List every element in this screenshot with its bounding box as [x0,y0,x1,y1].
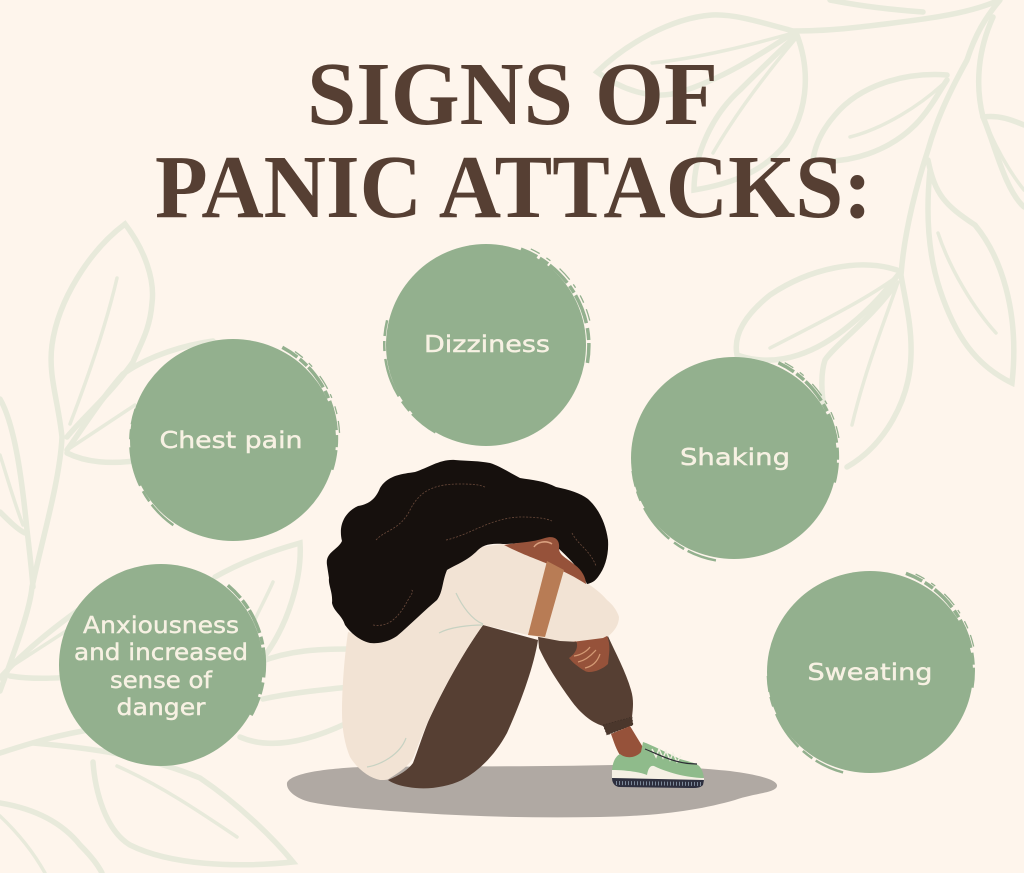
finger lines [574,647,600,668]
shoe sole [612,778,704,788]
circle: Shaking [590,313,878,603]
circle: Dizziness [344,204,628,486]
bandage on arm [528,561,564,637]
near lower leg trousers [538,634,633,726]
trouser cuff [603,717,633,735]
shoe laces [652,749,681,762]
thigh trousers [388,625,538,788]
circle: Sweating [728,529,1012,815]
shoe white panel [612,766,704,781]
face and ear [504,537,586,584]
title: SIGNS OF [307,45,718,144]
ground shadow [287,765,777,817]
circle: Chest pain [84,291,382,589]
circle: Shaking: Shaking [680,443,790,471]
circle: Anxiousness and increased sense of danger: Anxiousness [83,611,239,639]
illustration: seated woman hugging her knees [287,460,777,817]
background leaves: top right branch [597,0,1024,467]
title: PANIC ATTACKS: [155,138,872,237]
shoe upper [612,742,704,781]
hair strands [373,484,596,625]
circle: Sweating: Sweating [808,658,932,686]
circle: Chest pain: Chest pain [160,426,302,454]
hand [569,636,609,672]
title [155,45,872,237]
circle: Dizziness: Dizziness [424,330,550,358]
sweater crease lines [367,593,483,767]
circle: Anxiousness and increased sense of danger: danger [116,693,206,721]
sweater body [342,544,619,780]
circle: Anxiousness and increased sense of danger: sense of [110,666,213,694]
ankle [611,726,644,759]
circle: Anxiousness and increased sense of danger [15,519,307,811]
ear highlight [534,542,552,547]
background leaves: left branch [0,224,213,691]
black hair [327,460,608,643]
background leaves: bottom left branch [0,543,350,873]
circle: Anxiousness and increased sense of danger: and increased [74,638,248,666]
